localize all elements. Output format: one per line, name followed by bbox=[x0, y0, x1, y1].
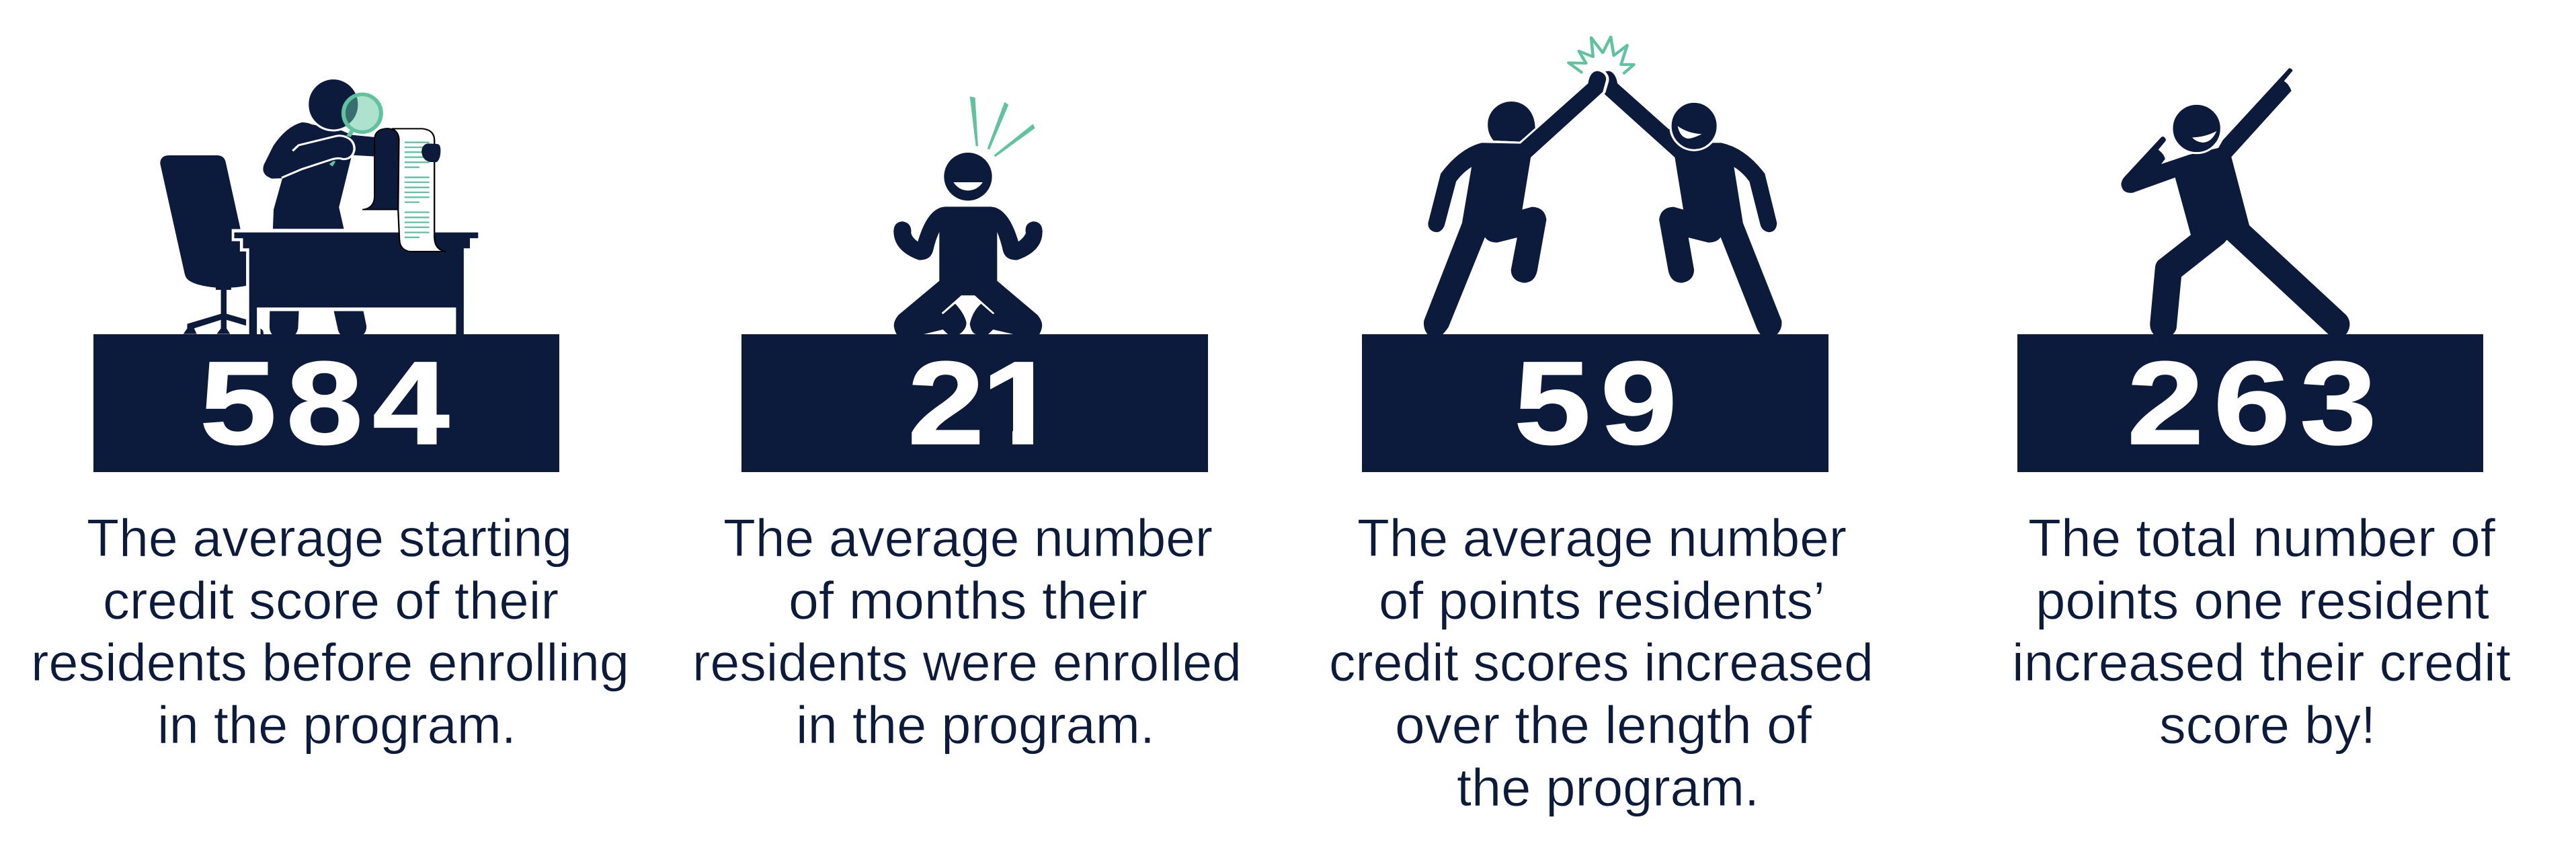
stat bar: 584: 584 bbox=[200, 337, 459, 469]
text: average points increased description: the program. bbox=[1457, 757, 1759, 817]
text: average months enrolled description bbox=[692, 508, 1242, 755]
stat bar: 21: 21 bbox=[908, 337, 1055, 469]
stat bar: 59: 59 bbox=[1514, 337, 1687, 469]
stat bar: 584 bbox=[93, 334, 559, 472]
panel: total points one resident increased bbox=[2012, 68, 2511, 755]
text: average starting credit score description: residents before enrolling bbox=[31, 632, 629, 692]
panel: average starting credit score bbox=[31, 79, 629, 755]
text: average starting credit score description: The average starting bbox=[87, 508, 572, 568]
text: total points increased description: score by! bbox=[2159, 695, 2376, 755]
stat bar: 263: 263 bbox=[2127, 337, 2386, 469]
text: average points increased description: of points residents’ bbox=[1379, 570, 1825, 630]
text: average points increased description: credit scores increased bbox=[1329, 632, 1874, 692]
text: average points increased description bbox=[1329, 508, 1874, 817]
text: average months enrolled description: residents were enrolled bbox=[692, 632, 1242, 692]
panel: average months enrolled bbox=[692, 96, 1242, 755]
icon: figure dabbing bbox=[2121, 68, 2349, 335]
text: average points increased description: over the length of bbox=[1395, 695, 1812, 755]
icon: person reviewing a credit report at a desk bbox=[160, 79, 478, 334]
text: average starting credit score description bbox=[31, 508, 629, 755]
text: total points increased description: increased their credit bbox=[2012, 632, 2511, 692]
stat bar: 263 bbox=[2017, 334, 2483, 472]
text: average starting credit score description: in the program. bbox=[157, 695, 516, 755]
stat bar: 21 bbox=[741, 334, 1208, 472]
text: average months enrolled description: in the program. bbox=[796, 695, 1155, 755]
icon: two figures high-fiving with green burst bbox=[1424, 37, 1781, 336]
text: average points increased description: The average number bbox=[1357, 508, 1847, 568]
text: total points increased description: The total number of bbox=[2028, 508, 2496, 568]
text: total points increased description: points one resident bbox=[2036, 570, 2489, 630]
text: average starting credit score description: credit score of their bbox=[103, 570, 559, 630]
panel: average points increased bbox=[1329, 37, 1874, 817]
text: average months enrolled description: of months their bbox=[789, 570, 1148, 630]
icon: excited seated figure with green rays bbox=[893, 96, 1043, 335]
text: total points increased description bbox=[2012, 508, 2511, 755]
text: average months enrolled description: The average number bbox=[723, 508, 1213, 568]
stat bar: 59 bbox=[1362, 334, 1828, 472]
